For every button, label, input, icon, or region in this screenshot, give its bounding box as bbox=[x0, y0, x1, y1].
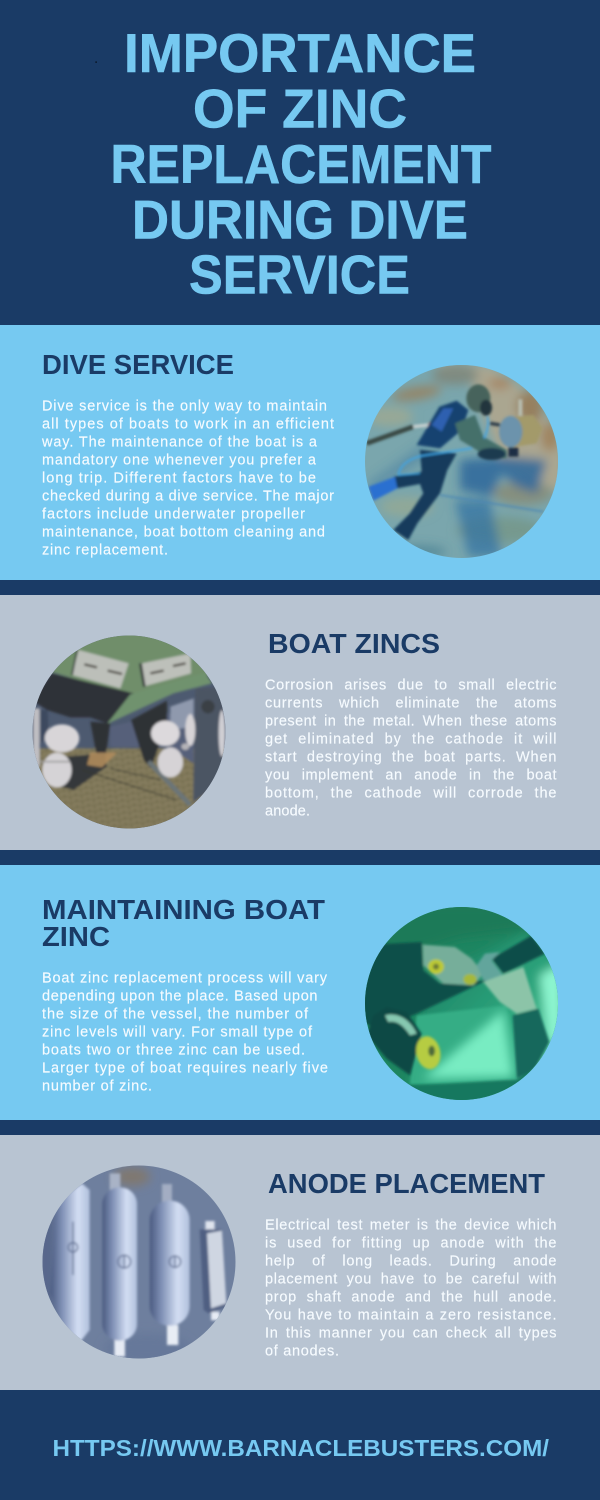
heading: maintaining boat zinc bbox=[42, 894, 325, 952]
title: OF ZINC bbox=[193, 78, 407, 140]
text block: maintaining boat zinc: zinc levels will vary. For small type of bbox=[42, 1024, 313, 1040]
text block: anode placement: placement you have to be careful with bbox=[265, 1271, 556, 1287]
title: IMPORTANCE bbox=[124, 22, 476, 84]
text block: maintaining boat zinc: boats two or three zinc can be used. bbox=[42, 1042, 305, 1058]
photo: diver cleaning hull bbox=[365, 365, 558, 558]
text block: dive service: factors include underwater propeller bbox=[42, 507, 305, 523]
text block: boat zincs: currents which eliminate the atoms bbox=[265, 695, 556, 711]
text block: dive service: checked during a dive service. The major bbox=[42, 489, 334, 505]
text block: boat zincs: you implement an anode in the boat bbox=[265, 767, 556, 783]
text block: anode placement: help of long leads. During anode bbox=[265, 1253, 556, 1269]
text block: dive service bbox=[41, 399, 334, 559]
text block: anode placement: In this manner you can check all types bbox=[265, 1325, 556, 1341]
text block: boat zincs: anode. bbox=[265, 803, 310, 819]
text block: dive service: long trip. Different factors have to be bbox=[42, 471, 316, 487]
text block: maintaining boat zinc bbox=[42, 970, 328, 1094]
text block: anode placement: You have to maintain a zero resistance. bbox=[265, 1307, 556, 1323]
text block: dive service: way. The maintenance of the boat is a bbox=[41, 435, 318, 451]
text block: boat zincs: bottom, the cathode will corrode the bbox=[265, 785, 556, 801]
title: REPLACEMENT bbox=[110, 133, 492, 195]
text block: anode placement bbox=[265, 1217, 556, 1359]
text block: dive service: all types of boats to work in an efficient bbox=[42, 417, 334, 433]
text block: maintaining boat zinc: number of zinc. bbox=[42, 1078, 152, 1094]
text block: anode placement: Electrical test meter is the device which bbox=[265, 1217, 556, 1233]
panel: dive service bbox=[0, 325, 600, 580]
text block: boat zincs: start destroying the boat parts. When bbox=[265, 749, 556, 765]
text block: anode placement: prop shaft anode and the hull anode. bbox=[265, 1289, 556, 1305]
title: SERVICE bbox=[189, 244, 410, 306]
text block: dive service: Dive service is the only way to maintain bbox=[42, 399, 327, 415]
text block: dive service: mandatory one whenever you prefer a bbox=[42, 453, 317, 469]
heading: boat zincs: BOAT ZINCS bbox=[268, 628, 440, 659]
text block: anode placement: of anodes. bbox=[265, 1343, 339, 1359]
heading: maintaining boat zinc: MAINTAINING BOAT bbox=[42, 894, 325, 925]
photo: divers' hands replacing zinc underwater bbox=[365, 907, 558, 1100]
panel: anode placement bbox=[0, 1135, 600, 1390]
photo: zinc anodes bbox=[42, 1166, 236, 1358]
text block: maintaining boat zinc: the size of the vessel, the number of bbox=[42, 1006, 309, 1022]
text block: dive service: maintenance, boat bottom cleaning and bbox=[42, 525, 325, 541]
panel: boat zincs bbox=[0, 595, 600, 850]
text block: boat zincs: present in the metal. When these atoms bbox=[265, 713, 556, 729]
text block: anode placement: is used for fitting up anode with the bbox=[265, 1235, 556, 1251]
text block: maintaining boat zinc: depending upon the place. Based upon bbox=[42, 988, 318, 1004]
title bbox=[110, 22, 492, 306]
stamped marks on anodes bbox=[68, 1222, 181, 1275]
text block: maintaining boat zinc: Larger type of boat requires nearly five bbox=[42, 1060, 328, 1076]
photo: boat hull with zinc anodes and propellers bbox=[32, 636, 226, 828]
panel: maintaining boat zinc bbox=[0, 865, 600, 1120]
heading: dive service: DIVE SERVICE bbox=[42, 349, 234, 380]
footer url: HTTPS://WWW.BARNACLEBUSTERS.COM/ bbox=[52, 1435, 550, 1461]
text block: boat zincs: get eliminated by the cathode it will bbox=[265, 731, 556, 747]
title: DURING DIVE bbox=[132, 188, 468, 250]
text block: dive service: zinc replacement. bbox=[42, 543, 168, 559]
text block: maintaining boat zinc: Boat zinc replacement process will vary bbox=[42, 970, 328, 986]
heading: anode placement: ANODE PLACEMENT bbox=[268, 1168, 545, 1199]
heading: maintaining boat zinc: ZINC bbox=[42, 921, 110, 952]
text block: boat zincs: Corrosion arises due to small electric bbox=[265, 677, 556, 693]
text block: boat zincs bbox=[265, 677, 556, 819]
